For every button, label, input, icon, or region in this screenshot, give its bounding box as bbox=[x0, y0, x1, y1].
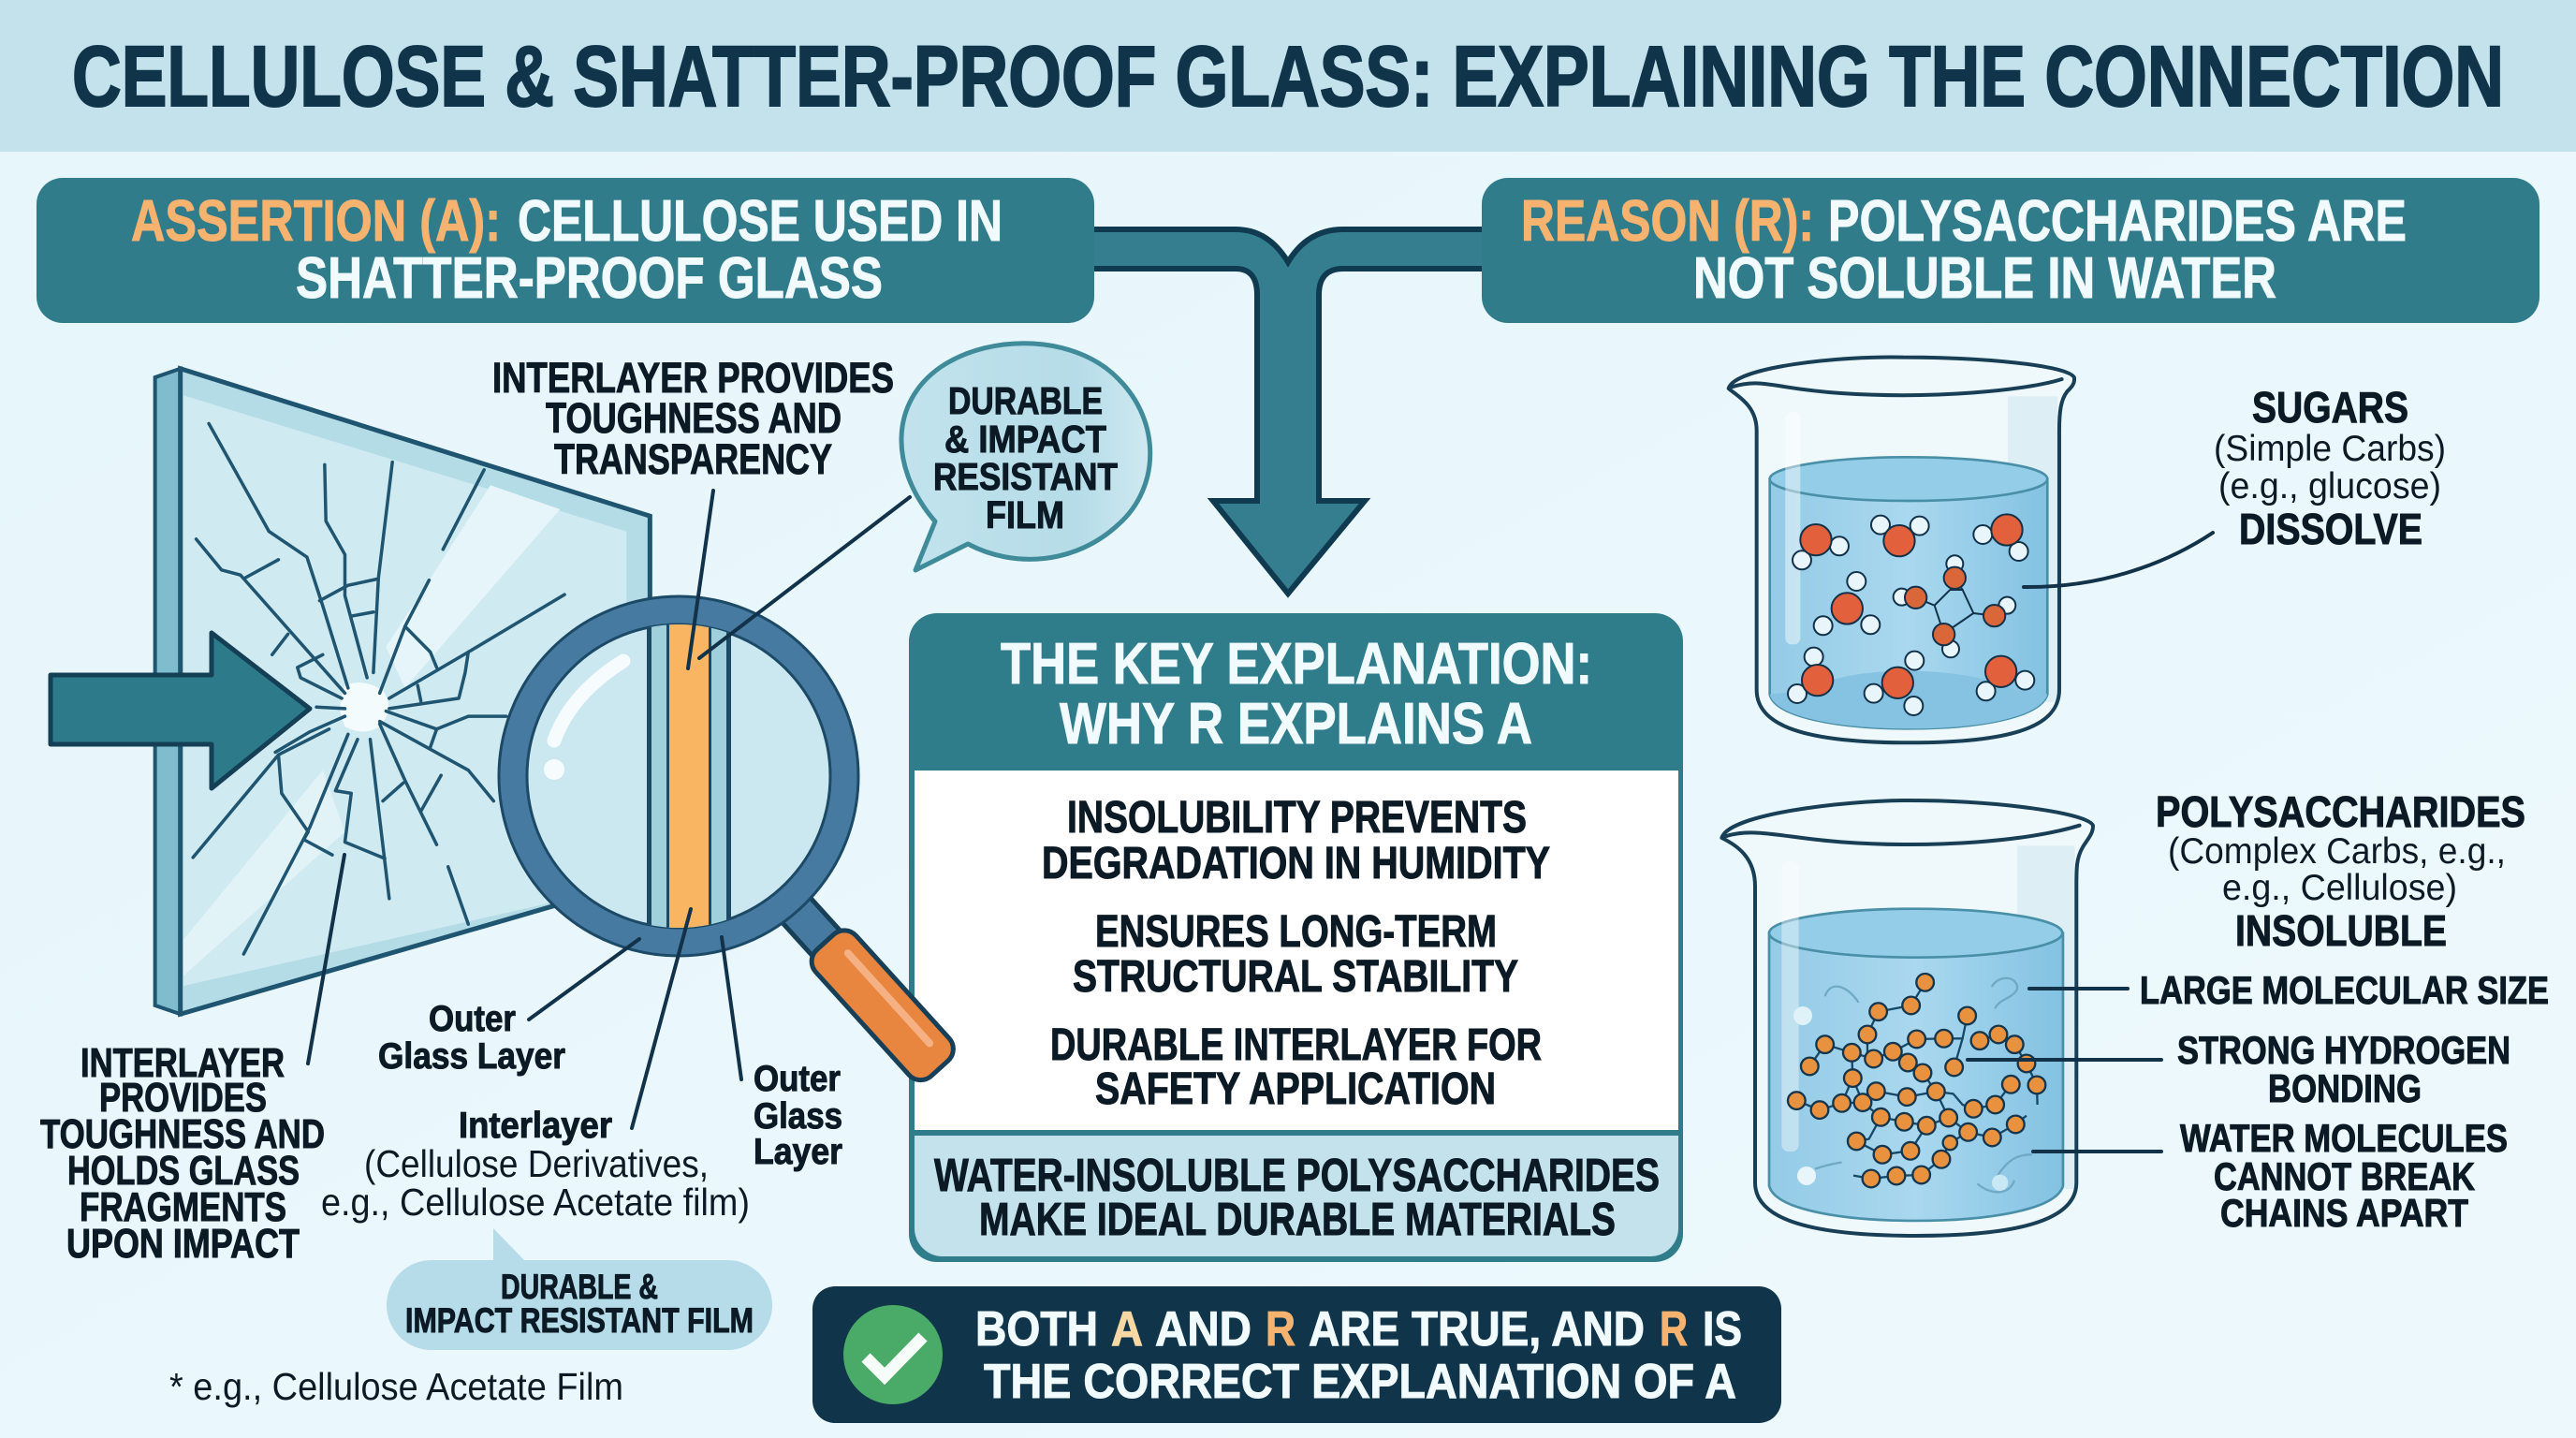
label: sugars dissolve: SUGARS bbox=[2252, 383, 2408, 432]
label: interlayer holds glass fragments bbox=[40, 1040, 325, 1267]
label: strong hydrogen bonding: STRONG HYDROGEN bbox=[2177, 1028, 2510, 1072]
label: polysaccharides insoluble bbox=[2156, 787, 2525, 955]
arrow: assertion and reason converge downward bbox=[1086, 229, 1488, 594]
illustration: cracked glass pane bbox=[155, 369, 650, 1014]
molecules: water swirls bbox=[1793, 978, 2031, 1192]
label: water molecules cannot break chains: WATER MOLECULES bbox=[2180, 1116, 2508, 1160]
text: explanation points bbox=[1042, 793, 1550, 1114]
leader lines: glass diagram bbox=[308, 491, 910, 1128]
icon: green check bbox=[843, 1305, 943, 1404]
heading: key explanation: THE KEY EXPLANATION: bbox=[1001, 632, 1592, 697]
label: outer glass layer right: Glass bbox=[754, 1096, 842, 1137]
panel: reason: POLYSACCHARIDES ARE bbox=[1828, 189, 2407, 254]
panel: reason: NOT SOLUBLE IN WATER bbox=[1693, 246, 2276, 311]
panel: assertion bbox=[37, 178, 1094, 323]
callout: durable and impact resistant film: DURABLE bbox=[948, 379, 1103, 422]
text: explanation points: STRUCTURAL STABILITY bbox=[1073, 952, 1518, 1002]
text: conclusion bbox=[934, 1151, 1660, 1245]
text: conclusion: WATER-INSOLUBLE POLYSACCHARIDES bbox=[934, 1151, 1660, 1201]
label: sugars dissolve: (e.g., glucose) bbox=[2218, 466, 2441, 506]
title bbox=[0, 0, 2576, 152]
callout: durable film pill bbox=[387, 1228, 772, 1350]
label: interlayer cellulose derivatives: (Cellulose Derivatives, bbox=[364, 1142, 709, 1185]
text: verdict bbox=[975, 1302, 1742, 1409]
text: conclusion: MAKE IDEAL DURABLE MATERIALS bbox=[979, 1195, 1616, 1245]
label: polysaccharides insoluble: INSOLUBLE bbox=[2235, 906, 2447, 955]
panel: assertion: CELLULOSE USED IN bbox=[518, 189, 1003, 254]
molecules: water bbox=[1788, 514, 2034, 715]
label: sugars dissolve bbox=[2214, 383, 2446, 553]
panel: assertion: SHATTER-PROOF GLASS bbox=[296, 246, 883, 311]
label: water molecules cannot break chains bbox=[2180, 1116, 2508, 1235]
label: water molecules cannot break chains: CANNOT BREAK bbox=[2214, 1154, 2475, 1198]
text: verdict: THE CORRECT EXPLANATION OF A bbox=[984, 1355, 1736, 1409]
illustration: sugars dissolved in beaker bbox=[1729, 358, 2074, 742]
text: verdict: AND bbox=[1155, 1302, 1251, 1357]
panel: verdict bbox=[812, 1286, 1781, 1423]
footnote: * e.g., Cellulose Acetate Film bbox=[169, 1365, 623, 1408]
text: verdict: R bbox=[1266, 1302, 1295, 1357]
label: outer glass layer left: Glass Layer bbox=[378, 1036, 565, 1077]
label: interlayer provides toughness and transparency: TOUGHNESS AND bbox=[546, 394, 842, 442]
label: interlayer cellulose derivatives: e.g., Cellulose Acetate film) bbox=[321, 1181, 750, 1224]
text: explanation points: INSOLUBILITY PREVENTS bbox=[1067, 793, 1527, 843]
label: interlayer holds glass fragments: UPON IMPACT bbox=[66, 1221, 300, 1267]
label: strong hydrogen bonding bbox=[2177, 1028, 2510, 1110]
text: explanation points: DURABLE INTERLAYER FOR bbox=[1050, 1020, 1542, 1070]
label: interlayer provides toughness and transparency bbox=[492, 354, 894, 483]
text: verdict: BOTH bbox=[975, 1302, 1098, 1357]
panel: reason: REASON (R): bbox=[1521, 189, 1814, 254]
label: polysaccharides insoluble: POLYSACCHARIDES bbox=[2156, 787, 2525, 836]
label: outer glass layer right: Layer bbox=[754, 1132, 842, 1172]
heading: key explanation: WHY R EXPLAINS A bbox=[1060, 692, 1532, 756]
label: polysaccharides insoluble: e.g., Cellulose) bbox=[2222, 868, 2457, 908]
label: outer glass layer left bbox=[378, 999, 565, 1077]
label: interlayer provides toughness and transparency: INTERLAYER PROVIDES bbox=[492, 354, 894, 402]
callout: durable film pill: DURABLE & bbox=[501, 1268, 658, 1306]
molecule: tangled cellulose chains bbox=[1788, 974, 2045, 1187]
arrow: impact force bbox=[51, 633, 310, 788]
text: explanation points: SAFETY APPLICATION bbox=[1095, 1064, 1496, 1114]
text: verdict: IS bbox=[1703, 1302, 1742, 1357]
label: sugars dissolve: (Simple Carbs) bbox=[2214, 429, 2446, 469]
icon: magnifying glass bbox=[499, 596, 959, 1087]
leader lines: polysaccharides bbox=[1968, 989, 2161, 1152]
label: strong hydrogen bonding: BONDING bbox=[2268, 1066, 2422, 1110]
panel: assertion: ASSERTION (A): bbox=[131, 189, 501, 254]
panel: key explanation bbox=[909, 613, 1683, 1262]
label: outer glass layer left: Outer bbox=[429, 999, 516, 1039]
callout: durable and impact resistant film: FILM bbox=[986, 493, 1064, 536]
heading: key explanation bbox=[1001, 632, 1592, 756]
label: outer glass layer right: Outer bbox=[754, 1059, 841, 1099]
callout: durable film pill: IMPACT RESISTANT FILM bbox=[405, 1301, 754, 1340]
label: interlayer holds glass fragments: HOLDS GLASS bbox=[67, 1148, 300, 1194]
text: explanation points: DEGRADATION IN HUMIDITY bbox=[1042, 839, 1550, 888]
label: interlayer holds glass fragments: PROVIDES bbox=[99, 1075, 267, 1121]
label: interlayer holds glass fragments: TOUGHNESS AND bbox=[40, 1111, 325, 1157]
label: outer glass layer right bbox=[754, 1059, 842, 1172]
callout: durable and impact resistant film: RESISTANT bbox=[933, 455, 1118, 498]
label: sugars dissolve: DISSOLVE bbox=[2239, 505, 2422, 553]
leader line: sugars bbox=[2024, 533, 2213, 587]
illustration: polysaccharides insoluble in beaker bbox=[1721, 800, 2093, 1236]
label: interlayer cellulose derivatives bbox=[321, 1106, 750, 1224]
label: interlayer provides toughness and transparency: TRANSPARENCY bbox=[554, 435, 832, 483]
label: interlayer cellulose derivatives: Interlayer bbox=[459, 1106, 612, 1146]
label: interlayer holds glass fragments: INTERLAYER bbox=[80, 1040, 285, 1086]
label: interlayer holds glass fragments: FRAGMENTS bbox=[80, 1184, 286, 1230]
panel: reason bbox=[1482, 178, 2539, 323]
label: polysaccharides insoluble: (Complex Carbs, e.g., bbox=[2168, 831, 2506, 872]
callout: durable and impact resistant film bbox=[901, 344, 1150, 570]
molecule: glucose bbox=[1894, 555, 2015, 657]
callout: durable and impact resistant film: & IMPACT bbox=[944, 418, 1106, 461]
text: explanation points: ENSURES LONG-TERM bbox=[1095, 907, 1497, 957]
text: verdict: A bbox=[1111, 1302, 1143, 1357]
text: verdict: ARE TRUE, AND bbox=[1309, 1302, 1645, 1357]
text: verdict: R bbox=[1660, 1302, 1688, 1357]
label: water molecules cannot break chains: CHAINS APART bbox=[2220, 1191, 2468, 1235]
